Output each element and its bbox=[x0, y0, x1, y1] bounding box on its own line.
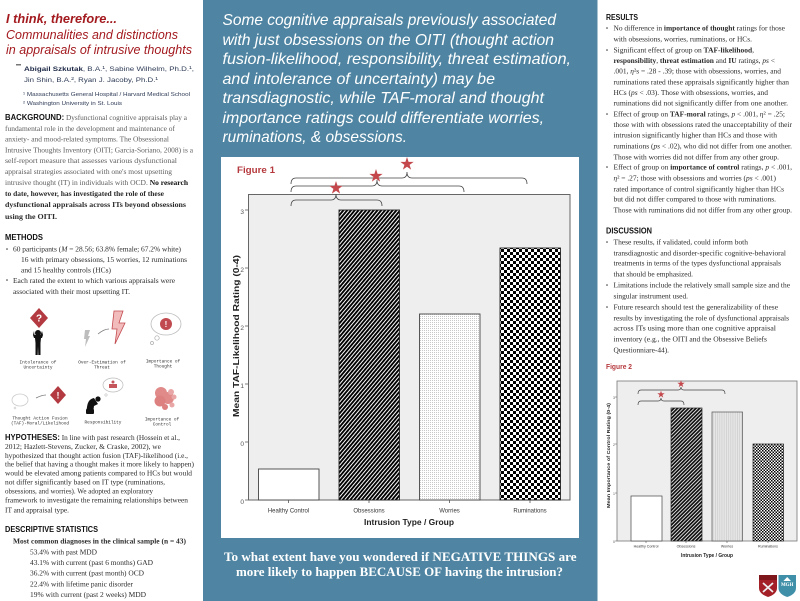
discussion list: singular instrument used. bbox=[614, 292, 688, 300]
bar: worries bbox=[712, 412, 742, 541]
icon: thought action fusion bbox=[11, 386, 69, 426]
significance brackets: figure 2 bbox=[638, 380, 725, 405]
descriptive statistics list: 53.4% with past MDD bbox=[30, 548, 98, 556]
y axis numbers: 3 bbox=[613, 396, 615, 400]
results heading: RESULTS bbox=[606, 13, 638, 22]
icon: intolerance of uncertainty: ? bbox=[36, 314, 42, 324]
results list: those with with obsessions rated the unacceptability of their bbox=[614, 120, 793, 129]
title: Communalities and distinctions bbox=[6, 28, 179, 42]
headline bbox=[222, 12, 571, 146]
methods list: and 15 healthy controls (HCs) bbox=[21, 266, 112, 274]
y axis numbers: 2 bbox=[613, 443, 615, 447]
figure 1 label: Figure 1 bbox=[237, 165, 276, 176]
x axis categories: Ruminations bbox=[758, 544, 778, 548]
bar chart: TAF-likelihood bbox=[231, 194, 570, 527]
icon: thought action fusion: (TAF)-Moral/Likelihood bbox=[11, 422, 69, 426]
background text: anxiety- and mood-related symptoms. The Obsessional bbox=[5, 134, 169, 144]
question: To what extent have you wondered if NEGATIVE THINGS are bbox=[224, 550, 577, 564]
icon: thought action fusion: ! bbox=[56, 390, 60, 400]
icon: importance of thought bbox=[146, 313, 181, 370]
x axis categories: Obsessions bbox=[677, 544, 696, 548]
hypotheses text bbox=[5, 433, 195, 514]
y axis numbers: 2 bbox=[240, 325, 244, 332]
icon: intolerance of uncertainty: Uncertainty bbox=[24, 366, 53, 370]
y axis numbers bbox=[240, 209, 244, 506]
affiliations: ¹ Massachusetts General Hospital / Harvard Medical School bbox=[23, 92, 190, 98]
results list bbox=[606, 24, 793, 214]
descriptive statistics heading: DESCRIPTIVE STATISTICS bbox=[5, 525, 98, 534]
results list: ruminations (ps < .02), who did not differ from one another. bbox=[614, 142, 792, 150]
icon: over-estimation of threat bbox=[78, 311, 126, 370]
descriptive statistics list: Most common diagnoses in the clinical sample (n = 43) bbox=[13, 536, 187, 546]
hypotheses text: would be elevated among patients compared to HCs but would bbox=[5, 468, 192, 478]
hypotheses text: 2012; Hazlett-Stevens, Zucker, & Craske, 2002), we bbox=[5, 442, 162, 451]
x axis categories bbox=[268, 508, 547, 514]
icon: importance of thought: Importance of bbox=[146, 360, 180, 364]
question bbox=[224, 550, 577, 579]
icon: thought action fusion: Thought Action Fusion bbox=[12, 416, 68, 422]
results list: rated importance of control significantly higher than HCs bbox=[614, 184, 784, 194]
bar: obsessions bbox=[339, 210, 400, 500]
descriptive statistics list: 36.2% with current (past month) OCD bbox=[30, 568, 145, 578]
results list: .001, η²s = .28 - .39; those with obsessions, worries, and bbox=[614, 66, 781, 76]
results list: responsibility, threat estimation and IU ratings, ps < bbox=[614, 56, 775, 65]
bar chart: importance of control bbox=[606, 381, 797, 559]
discussion list: that should be emphasized. bbox=[614, 270, 693, 278]
bar: healthy control bbox=[258, 469, 319, 500]
discussion list: Questionniare-44). bbox=[614, 346, 669, 354]
y axis numbers bbox=[613, 396, 615, 544]
results list: Effect of group on TAF-moral ratings, p < .001, η² = .25; bbox=[614, 110, 785, 118]
results list: Those with ruminations did not differ from any other group. bbox=[614, 206, 792, 214]
methods list: associated with their most upsetting IT. bbox=[13, 287, 130, 296]
x axis categories bbox=[634, 544, 778, 548]
authors bbox=[16, 64, 194, 84]
icon: importance of thought: Thought bbox=[154, 364, 173, 370]
background text bbox=[5, 113, 194, 221]
results list: ruminations rated these appraisals significantly higher than bbox=[614, 78, 789, 86]
background text: Intrusive Thoughts Inventory (OITI; Garcia-Soriano, 2008) is a bbox=[5, 146, 194, 154]
background text: appraisal strategies associated with one's most upsetting bbox=[5, 167, 172, 176]
x axis categories: Worries bbox=[439, 508, 460, 514]
x axis title: Intrusion Type / Group bbox=[364, 517, 454, 527]
authors: Abigail Szkutak , B.A.¹, Sabine Wilhelm, Ph.D.¹, bbox=[24, 66, 194, 73]
panel: figure 1 bbox=[221, 157, 579, 538]
discussion list bbox=[606, 238, 791, 354]
icon: importance of control: Importance of bbox=[145, 418, 179, 422]
hypotheses text: obsessions, and worries). We adopted an exploratory bbox=[5, 486, 153, 496]
y axis numbers: 2 bbox=[240, 267, 244, 274]
background text: using the OITI. bbox=[5, 212, 57, 221]
discussion list: Limitations include the relatively small sample size and the bbox=[614, 280, 791, 290]
bar: obsessions bbox=[671, 408, 702, 541]
figure 2 label: Figure 2 bbox=[606, 362, 632, 371]
hypotheses text: the belief that having a thought makes it more likely to happen) bbox=[5, 460, 195, 468]
background text: dysfunctional appraisals across ITs beyond obsessions bbox=[5, 200, 186, 209]
headline: with just obsessions on the OITI (thought action bbox=[222, 32, 554, 49]
y axis numbers: 1 bbox=[240, 383, 244, 390]
results list: HCs (ps < .03). Those with obsessions, worries, and bbox=[614, 88, 768, 97]
descriptive statistics list: 43.1% with current (past 6 months) GAD bbox=[30, 558, 154, 567]
logo: Harvard Medical School shield bbox=[759, 575, 777, 597]
x axis categories: Worries bbox=[721, 544, 733, 548]
y axis title: Mean Importance of Control Rating (0-4) bbox=[606, 402, 611, 508]
headline: fusion-likelihood, responsibility, threat estimation, bbox=[222, 51, 571, 68]
x axis categories: Ruminations bbox=[513, 508, 547, 514]
question: more likely to happen BECAUSE OF having the intrusion? bbox=[236, 565, 563, 579]
results list: Those with worries did not differ from any other group. bbox=[614, 152, 779, 162]
discussion list: results by investigating the role of dysfunctional appraisals bbox=[614, 314, 789, 322]
hypotheses text: hypothesized that thought action fusion (TAF)-likelihood (i.e., bbox=[5, 451, 188, 460]
icon: over-estimation of threat: Over-Estimation of bbox=[78, 360, 126, 366]
headline: and intolerance of uncertainty) may be bbox=[222, 71, 495, 88]
hypotheses text: not differ significantly based on IT type (ruminations, bbox=[5, 478, 165, 486]
results list: ruminations did not significantly differ from one another. bbox=[614, 98, 788, 108]
significance brackets bbox=[291, 157, 527, 206]
icon: importance of control: Control bbox=[153, 422, 172, 428]
descriptive statistics list bbox=[13, 536, 187, 599]
bar: healthy control bbox=[631, 496, 662, 541]
affiliations: ² Washington University in St. Louis bbox=[23, 101, 122, 107]
headline: importance ratings could differentiate worries, bbox=[222, 110, 544, 127]
results list: but did not differ compared to those with ruminations. bbox=[614, 194, 776, 204]
bar: worries bbox=[420, 314, 480, 500]
results list: η² = .27; those with obsessions and worries (ps < .001) bbox=[614, 174, 777, 182]
discussion list: transdiagnostic and disorder-specific cognitive-behavioral bbox=[614, 248, 786, 258]
hypotheses text: IT and appraisal type. bbox=[5, 506, 69, 514]
icon: over-estimation of threat: Threat bbox=[94, 366, 110, 370]
descriptive statistics list: 22.4% with lifetime panic disorder bbox=[30, 580, 134, 588]
background text: self-report measure that assesses various dysfunctional bbox=[5, 156, 177, 165]
y axis title: Mean TAF-Likelihood Rating (0-4) bbox=[231, 255, 241, 417]
discussion list: treatments in terms of the types dysfunctional appraisals bbox=[614, 258, 781, 268]
results list: No difference in importance of thought ratings for those bbox=[614, 24, 786, 32]
panel: centre bbox=[203, 0, 598, 601]
methods list bbox=[6, 244, 187, 296]
title bbox=[6, 12, 193, 57]
y axis numbers: 0 bbox=[240, 499, 244, 506]
background text: to date, however, has investigated the role of these bbox=[5, 189, 165, 198]
title: I think, therefore... bbox=[6, 12, 117, 26]
headline: ruminations, & obsessions. bbox=[222, 129, 407, 146]
icon: importance of thought: ! bbox=[165, 320, 167, 329]
logo: MGH shield: MGH bbox=[781, 583, 794, 588]
icon: intolerance of uncertainty: Intolerance of bbox=[20, 360, 57, 366]
headline: transdiagnostic, while TAF-moral and thought bbox=[222, 90, 545, 107]
background text: fundamental role in the development and maintenance of bbox=[5, 124, 176, 133]
x axis title: Intrusion Type / Group bbox=[681, 553, 733, 559]
x axis categories: Healthy Control bbox=[268, 508, 309, 514]
hypotheses text: HYPOTHESES: In line with past research (Hossein et al., bbox=[5, 433, 180, 442]
y axis numbers: 0 bbox=[240, 441, 244, 448]
bar: ruminations bbox=[753, 444, 784, 541]
icon: responsibility bbox=[85, 378, 123, 426]
authors: Jin Shin, B.A.², Ryan J. Jacoby, Ph.D.¹ bbox=[24, 77, 159, 84]
methods list: Each rated the extent to which various appraisals were bbox=[13, 276, 176, 285]
results list: with obsessions, worries, ruminations, or HCs. bbox=[614, 34, 752, 44]
discussion list: across ITs using more than one cognitive appraisal bbox=[614, 324, 776, 332]
results list: Significant effect of group on TAF-likelihood, bbox=[614, 46, 754, 54]
icon: intolerance of uncertainty bbox=[20, 308, 57, 370]
background text: intrusive thought (IT) in individuals with OCD. No research bbox=[5, 178, 188, 187]
discussion list: inventory (e.g., the OITI and the Obsessive Beliefs bbox=[614, 334, 767, 344]
title: in appraisals of intrusive thoughts bbox=[6, 43, 193, 57]
y axis numbers: 1 bbox=[613, 492, 615, 496]
discussion list: These results, if validated, could inform both bbox=[614, 238, 748, 246]
descriptive statistics list: 19% with current (past 2 weeks) MDD bbox=[30, 590, 147, 599]
methods heading: METHODS bbox=[5, 233, 43, 242]
affiliations bbox=[23, 92, 190, 107]
bar: ruminations bbox=[500, 248, 560, 500]
methods list: 60 participants (M = 28.56; 63.8% female; 67.2% white) bbox=[13, 244, 182, 254]
x axis categories: Healthy Control bbox=[634, 544, 659, 548]
icon: importance of control bbox=[145, 387, 179, 428]
y axis numbers: 3 bbox=[240, 209, 244, 216]
methods list: 16 with primary obsessions, 15 worries, 12 ruminations bbox=[21, 255, 187, 264]
logo: MGH shield bbox=[778, 575, 796, 597]
results list: Effect of group on importance of control ratings, p < .001, bbox=[614, 162, 792, 172]
discussion list: Future research should test the generalizability of these bbox=[614, 302, 779, 312]
hypotheses text: framework to investigate the remaining relationships between bbox=[5, 496, 188, 504]
results list: intrusion significantly higher than HCs and those with bbox=[614, 130, 777, 140]
y axis numbers: 0 bbox=[613, 540, 615, 544]
x axis categories: Obsessions bbox=[353, 508, 385, 514]
icon: responsibility: Responsibility bbox=[85, 420, 122, 426]
headline: Some cognitive appraisals previously associated bbox=[222, 12, 557, 29]
discussion heading: DISCUSSION bbox=[606, 226, 652, 236]
background text: BACKGROUND: Dysfunctional cognitive appraisals play a bbox=[5, 113, 188, 122]
